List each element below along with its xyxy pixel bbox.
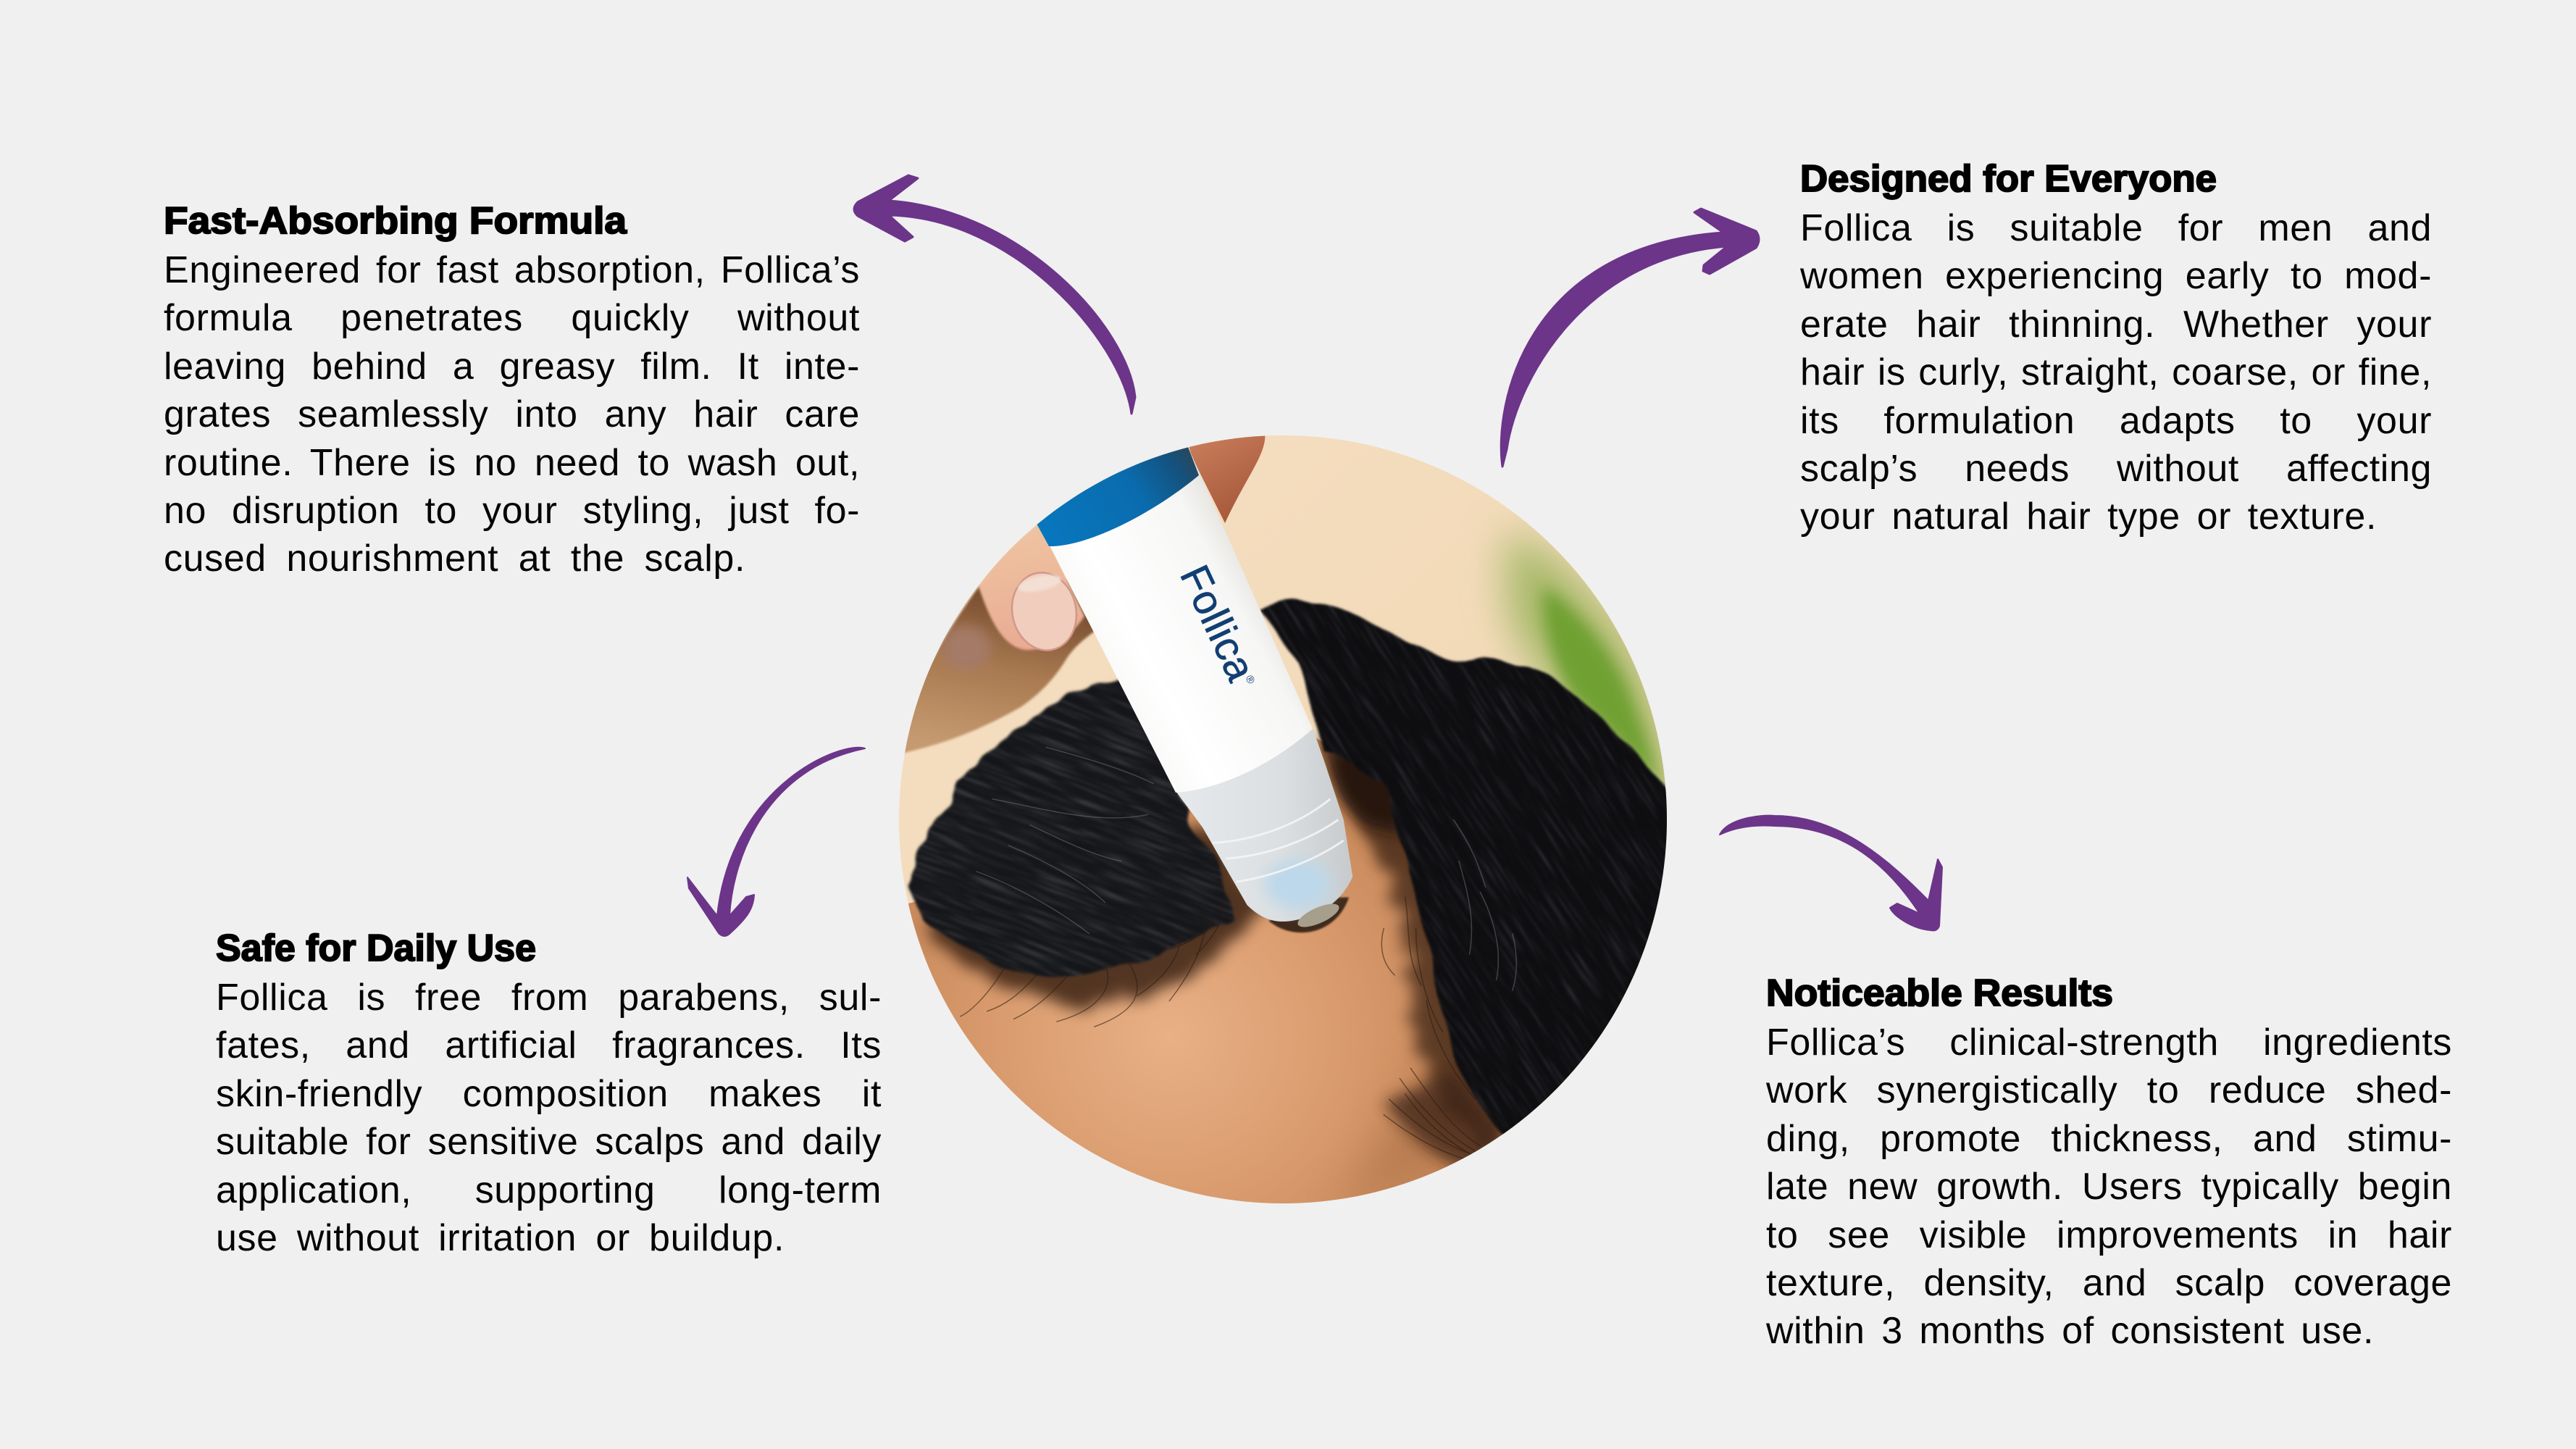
text block: no disruption to your styling, just fo- — [164, 490, 860, 532]
text block: leaving behind a greasy film. It inte- — [164, 346, 860, 388]
text block: routine. There is no need to wash out, — [164, 442, 860, 484]
heading: Safe for Daily Use — [216, 927, 536, 969]
product: roller head — [1176, 729, 1352, 922]
panel: Noticeable Results — [1766, 972, 2452, 1352]
text block: late new growth. Users typically begin — [1766, 1166, 2452, 1208]
text block: ding, promote thickness, and stimu- — [1766, 1118, 2452, 1160]
text block: formula penetrates quickly without — [164, 297, 860, 339]
hand: back fingers — [895, 580, 1097, 755]
text block — [1766, 1022, 2452, 1352]
text block: women experiencing early to mod- — [1800, 255, 2432, 297]
text block: use without irritation or buildup. — [216, 1217, 785, 1259]
panel: Fast-Absorbing Formula — [164, 200, 860, 580]
heading: Noticeable Results — [1766, 972, 2113, 1014]
text block: hair is curly, straight, coarse, or fine, — [1800, 351, 2432, 393]
text block — [164, 249, 860, 580]
heading: Designed for Everyone — [1800, 158, 2217, 200]
hand: thumb nail — [1011, 572, 1077, 651]
product: Follica logo: Follica — [1171, 558, 1264, 688]
product: white tube — [1029, 427, 1313, 793]
text block: to see visible improvements in hair — [1766, 1214, 2452, 1256]
text block — [216, 977, 882, 1259]
text block: fates, and artificial fragrances. Its — [216, 1024, 882, 1066]
text block: Follica is free from parabens, sul- — [216, 977, 882, 1019]
product: blue cap — [1037, 447, 1199, 546]
text block: Engineered for fast absorption, Follica’s — [164, 249, 860, 291]
text block: texture, density, and scalp coverage — [1766, 1262, 2452, 1304]
text block: its formulation adapts to your — [1800, 400, 2432, 442]
product: dimple under roller — [1268, 898, 1349, 932]
heading: Fast-Absorbing Formula — [164, 200, 627, 242]
text block — [1800, 207, 2432, 538]
text block: Follica’s clinical-strength ingredients — [1766, 1022, 2452, 1064]
icon: blurred plant — [1507, 530, 1678, 830]
product: Follica logo: ® — [1242, 673, 1257, 686]
text block: scalp’s needs without affecting — [1800, 448, 2432, 490]
text block: skin-friendly composition makes it — [216, 1073, 882, 1115]
text block: erate hair thinning. Whether your — [1800, 304, 2432, 346]
skin — [908, 738, 1649, 1203]
hair: right mass — [1259, 597, 1667, 1135]
panel: Safe for Daily Use — [216, 927, 882, 1259]
text block: grates seamlessly into any hair care — [164, 393, 860, 435]
text block: cused nourishment at the scalp. — [164, 538, 745, 580]
text block: within 3 months of consistent use. — [1766, 1310, 2374, 1352]
text block: application, supporting long-term — [216, 1169, 882, 1211]
central photo: roller applied to scalp — [899, 435, 1667, 1203]
text block: your natural hair type or texture. — [1800, 496, 2377, 538]
panel: Designed for Everyone — [1800, 158, 2432, 538]
product: roller ribs — [1212, 799, 1344, 882]
hair: strands — [961, 747, 1516, 1158]
hair: brown fringe — [923, 737, 1566, 1172]
text block: work synergistically to reduce shed- — [1766, 1069, 2452, 1111]
hand: thumb — [979, 522, 1084, 650]
hair: left mass — [906, 678, 1236, 979]
text block: suitable for sensitive scalps and daily — [216, 1121, 882, 1163]
hand: top finger — [1185, 432, 1265, 523]
text block: Follica is suitable for men and — [1800, 207, 2432, 249]
